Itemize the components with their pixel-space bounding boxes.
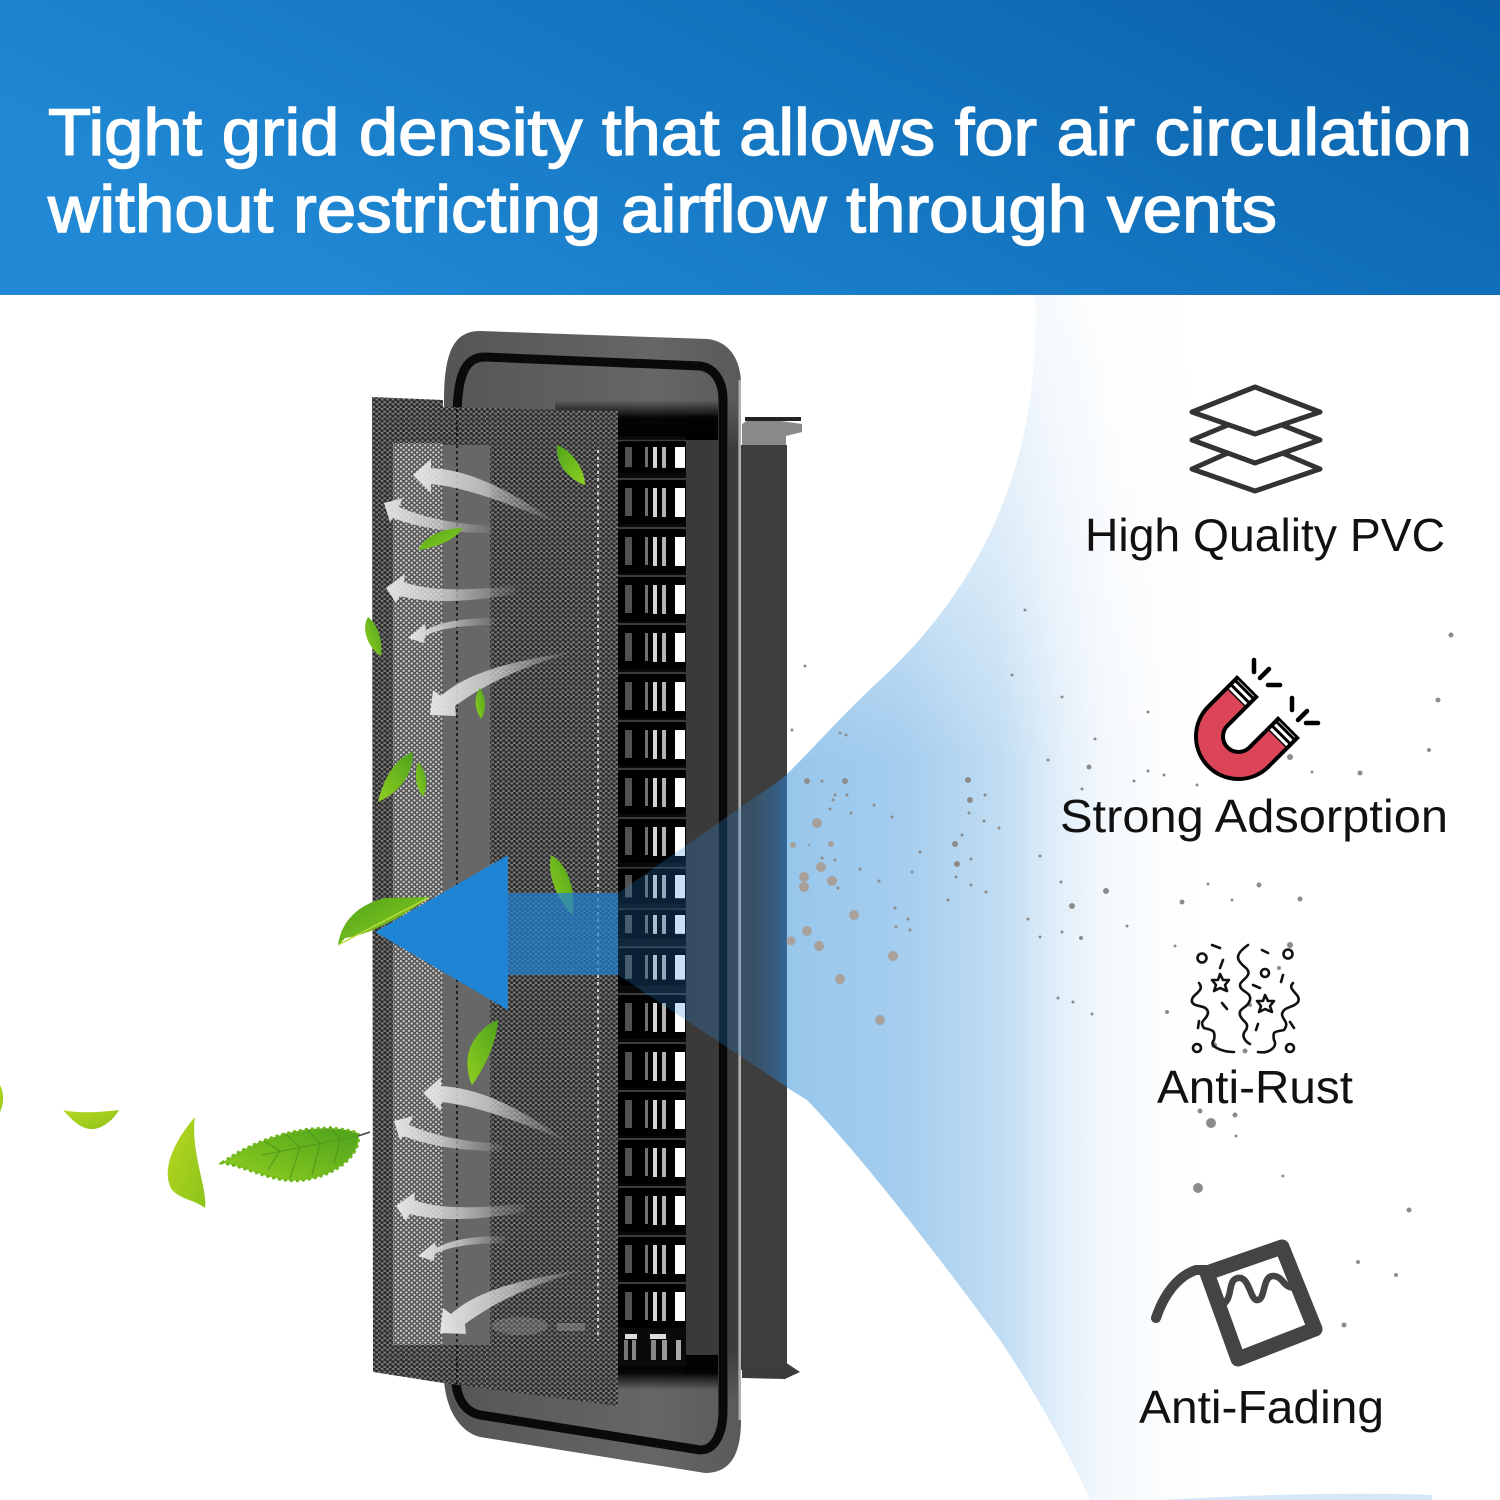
beam bottom sliver (1160, 1494, 1432, 1500)
airflow arrows bottom (394, 1077, 582, 1334)
feature: anti-rust (1157, 945, 1353, 1113)
feature: high quality PVC (1085, 387, 1445, 561)
header banner (0, 0, 1500, 295)
vent product (444, 331, 802, 1473)
label: High Quality PVC (1085, 509, 1445, 561)
right rim dark section (728, 400, 738, 1400)
bottom shadow (618, 1355, 718, 1390)
airflow arrows top (384, 459, 572, 716)
frame inner groove (456, 357, 723, 1450)
title (47, 95, 1472, 246)
icon: magnet (1209, 660, 1318, 766)
label: Anti-Rust (1157, 1061, 1353, 1113)
airflow overlay on vent (618, 775, 787, 1087)
label: Anti-Fading (1139, 1381, 1384, 1433)
mesh dotted lines (457, 403, 598, 1385)
mesh outline (372, 397, 618, 1406)
large leaf at arrow tip (338, 897, 430, 946)
icon: paint bucket (1156, 1247, 1315, 1359)
blue arrow head (375, 855, 508, 1010)
perforated mesh sheet (372, 397, 618, 1406)
feature: strong adsorption (1060, 660, 1448, 842)
leaves on mesh (365, 445, 585, 1085)
label: Strong Adsorption (1060, 790, 1448, 842)
blue airflow beam (780, 295, 1500, 1500)
vent slots (618, 436, 686, 1366)
top shadow (555, 400, 718, 440)
title: Tight grid density that allows for air circulation (48, 95, 1472, 169)
mesh solid strip (443, 445, 490, 1345)
vent frame (444, 331, 741, 1473)
title: without restricting airflow through vents (47, 172, 1277, 246)
arrow shaft over mesh (508, 893, 618, 975)
dust particles (786, 608, 1454, 1328)
icon: rust particles (1192, 945, 1299, 1052)
vent side housing (741, 417, 802, 1379)
frame edge highlight (738, 380, 741, 1420)
feature: anti-fading (1139, 1247, 1384, 1433)
mesh logo smudge (492, 1317, 585, 1335)
inner dark column (686, 415, 718, 1375)
falling leaves (0, 1085, 370, 1208)
icon: layers (1192, 387, 1320, 491)
mesh light perforations (393, 443, 443, 1345)
